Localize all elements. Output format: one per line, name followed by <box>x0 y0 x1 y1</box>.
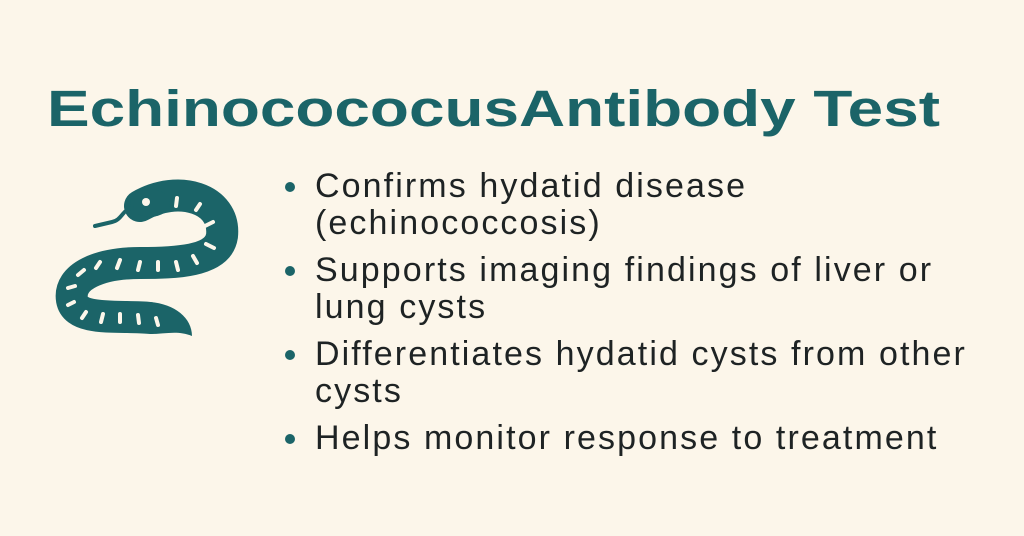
bullet 2: Supports imaging findings of liver or <box>315 251 933 289</box>
bullet 3: cysts <box>315 372 403 410</box>
title: EchinocococusAntibody Test <box>47 80 940 137</box>
bullet 1: Confirms hydatid disease <box>315 167 747 205</box>
icon: snake <box>68 189 222 336</box>
bullet 3: Differentiates hydatid cysts from other <box>315 335 967 373</box>
bullet 2: lung cysts <box>315 288 487 326</box>
bullet 3 <box>285 335 967 410</box>
bullet 1: (echinococcosis) <box>315 204 602 242</box>
bullet list <box>285 167 967 457</box>
bullet 4: Helps monitor response to treatment <box>315 419 938 457</box>
bullet 1 <box>285 167 747 242</box>
bullet 2 <box>285 251 933 326</box>
